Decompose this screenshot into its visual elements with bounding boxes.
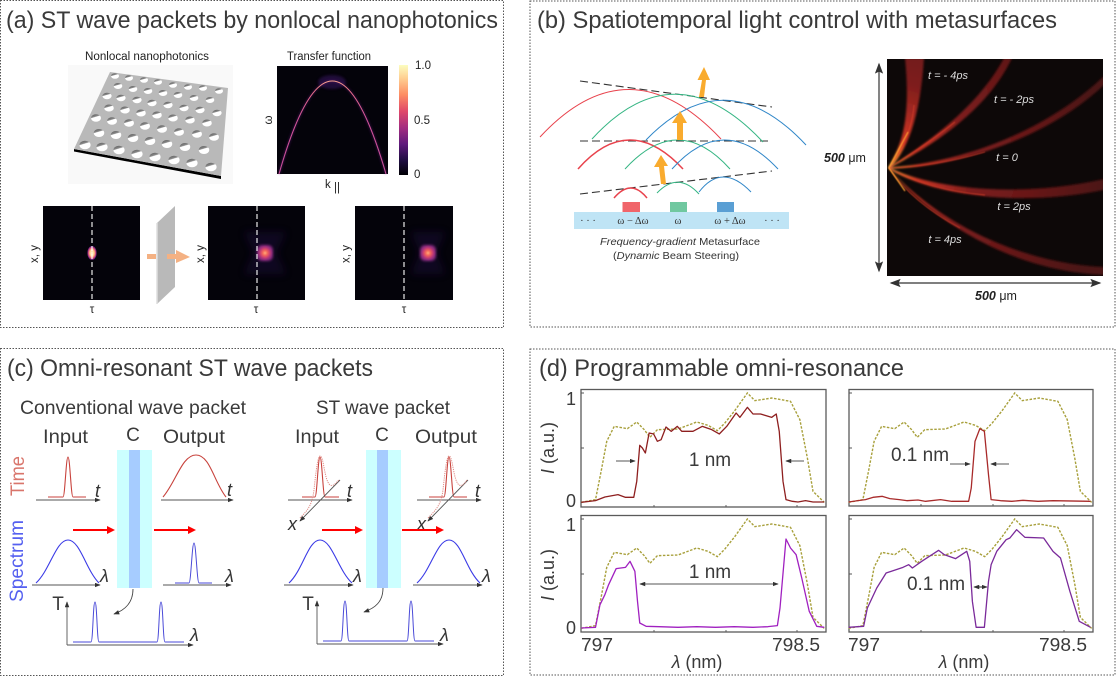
y axis labels: bottom row: 0	[566, 618, 576, 638]
panel: (d) Programmable omni-resonance	[530, 349, 1115, 675]
panel: (b) Spatiotemporal light control with metasurfaces	[530, 1, 1115, 327]
plot: ST output time: t	[475, 481, 481, 501]
column labels: right: Input	[295, 427, 340, 448]
axis label: omega: ω	[263, 115, 275, 124]
chart: 0.1 nm band pass: 0.1 nm	[891, 445, 949, 466]
transmission plot: left	[52, 594, 199, 645]
y axis labels: bottom row	[538, 515, 576, 638]
plot: conventional output spectrum: λ	[224, 566, 234, 586]
x axis labels: right chart: 798.5	[1039, 635, 1087, 655]
caption: metasurface	[600, 236, 760, 262]
heat map: output pulse two: x, y	[340, 245, 352, 263]
plot: ST input time: x	[287, 514, 298, 534]
y axis labels: bottom row: 1	[566, 515, 576, 535]
transmission plot: left: T	[52, 594, 64, 615]
y axis labels: top row: I (a.u.)	[538, 422, 558, 474]
plot: ST input time: t	[347, 481, 353, 501]
plot: conventional output time	[161, 455, 233, 500]
column labels: left	[43, 425, 226, 448]
y axis labels: top row: 0	[566, 491, 576, 511]
chart: 0.1 nm band stop: 0.1 nm	[907, 574, 965, 595]
plot: conventional input spectrum: λ	[99, 566, 109, 586]
chart: 1 nm band pass: 1 nm	[689, 450, 731, 471]
arrows: right red beam	[322, 526, 444, 534]
x axis labels: left chart: 798.5	[772, 635, 820, 655]
heading: transfer function: Transfer function	[287, 51, 371, 63]
colour bar: 0.5	[414, 115, 430, 127]
y axis labels: top row: 1	[566, 389, 576, 409]
metasurface bar with resonators	[574, 202, 789, 229]
arrow: cavity to transmission left	[114, 589, 133, 614]
chart: 1 nm band stop: 1 nm	[689, 562, 731, 583]
metasurface bar with resonators: ω	[675, 216, 682, 227]
heat map: output pulse one: x, y	[195, 245, 207, 263]
arrow: cavity to transmission right	[364, 588, 383, 612]
x axis labels: left chart	[581, 635, 820, 672]
illustration: perforated photonic slab	[68, 65, 233, 184]
title (d): (d) Programmable omni-resonance	[539, 355, 904, 382]
arrows: left red beam	[73, 526, 196, 534]
chart: transfer function heat map	[277, 66, 388, 174]
column labels: left: Output	[163, 427, 226, 448]
heading: nonlocal nanophotonics: Nonlocal nanophotonics	[85, 51, 209, 63]
y axis labels: bottom row: I (a.u.)	[538, 549, 558, 601]
plot: ST output spectrum	[413, 540, 491, 586]
plot: ST input spectrum: λ	[352, 566, 362, 586]
vertical scale arrow: 500 μm	[824, 151, 866, 165]
colour bar	[399, 60, 431, 181]
icon: nonlocal slab with arrow	[147, 206, 190, 304]
transmission plot: right	[302, 594, 449, 645]
heat map: output pulse two	[340, 206, 453, 316]
chart: 1 nm band pass	[581, 390, 826, 507]
axis label: k parallel	[325, 179, 340, 194]
diagram: wavefront arcs	[540, 81, 806, 198]
heat map: dynamic beam steering: t = 2ps	[997, 201, 1031, 213]
x axis labels: right chart: 797	[848, 635, 880, 655]
column labels: right	[295, 425, 478, 448]
heat map: dynamic beam steering: t = - 2ps	[994, 94, 1035, 106]
heat map: dynamic beam steering	[887, 58, 1104, 276]
x axis labels: right chart	[848, 635, 1087, 672]
metasurface bar with resonators: · · ·	[580, 216, 596, 227]
column labels: left: Input	[43, 427, 89, 448]
transmission plot: right: λ	[439, 625, 449, 645]
icon: orange direction arrows	[654, 67, 710, 184]
heat map: output pulse one	[195, 206, 305, 316]
metasurface bar with resonators: ω − Δω	[617, 216, 649, 227]
cavity: right	[366, 450, 401, 588]
axis label: k parallel: ||	[334, 182, 340, 194]
heading: ST wave packet: ST wave packet	[316, 398, 451, 419]
chart: 1 nm band stop	[581, 516, 826, 632]
plot: ST output spectrum: λ	[481, 566, 491, 586]
title (a): (a) ST wave packets by nonlocal nanophotonics	[6, 7, 498, 34]
heat map: output pulse one: τ	[254, 304, 259, 316]
colour bar: 1.0	[415, 60, 431, 72]
column labels: left: C	[126, 425, 140, 446]
heat map: dynamic beam steering: t = - 4ps	[928, 70, 969, 82]
y axis labels: top row	[538, 389, 576, 511]
heat map: input pulse	[29, 206, 140, 316]
x axis labels: left chart: λ (nm)	[671, 652, 722, 672]
caption: metasurface: (Dynamic Beam Steering)	[613, 250, 739, 262]
x axis labels: left chart: 797	[581, 635, 613, 655]
title (c): (c) Omni-resonant ST wave packets	[7, 355, 373, 382]
colour bar: 0	[414, 169, 420, 181]
cavity: left	[117, 450, 152, 588]
metasurface bar with resonators: · · ·	[764, 216, 780, 227]
panel: (c) Omni-resonant ST wave packets	[0, 348, 504, 676]
plot: ST output time	[416, 456, 481, 534]
row label: spectrum: Spectrum	[7, 520, 28, 602]
chart: 0.1 nm band stop	[849, 516, 1093, 632]
plot: ST input time	[287, 456, 353, 534]
plot: ST input spectrum	[284, 540, 362, 586]
title (b): (b) Spatiotemporal light control with metasurfaces	[537, 7, 1057, 34]
transmission plot: left: λ	[189, 625, 199, 645]
plot: ST output time: x	[416, 514, 427, 534]
chart: 0.1 nm band pass	[849, 390, 1093, 506]
x axis labels: right chart: λ (nm)	[938, 652, 989, 672]
plot: conventional input time	[36, 457, 101, 501]
heat map: input pulse: x, y	[29, 245, 41, 263]
axis label: k parallel: k	[325, 179, 331, 191]
caption: metasurface: Frequency-gradient Metasurface	[600, 236, 760, 248]
column labels: right: Output	[415, 427, 478, 448]
heat map: dynamic beam steering: t = 0	[996, 152, 1019, 164]
transmission plot: right: T	[302, 594, 314, 615]
heat map: output pulse two: τ	[402, 304, 407, 316]
heading: conventional wave packet: Conventional wave packet	[20, 398, 247, 419]
heat map: input pulse: τ	[90, 304, 95, 316]
column labels: right: C	[375, 425, 389, 446]
plot: conventional output time: t	[227, 480, 233, 500]
plot: conventional input time: t	[95, 481, 101, 501]
heat map: dynamic beam steering: t = 4ps	[928, 234, 962, 246]
plot: conventional input spectrum	[32, 540, 109, 586]
panel: (a) ST wave packets by nonlocal nanophotonics	[0, 0, 504, 328]
horizontal scale arrow: 500 μm	[975, 289, 1017, 303]
plot: conventional output spectrum	[163, 543, 234, 586]
row label: time: Time	[8, 456, 29, 496]
metasurface bar with resonators: ω + Δω	[714, 216, 746, 227]
